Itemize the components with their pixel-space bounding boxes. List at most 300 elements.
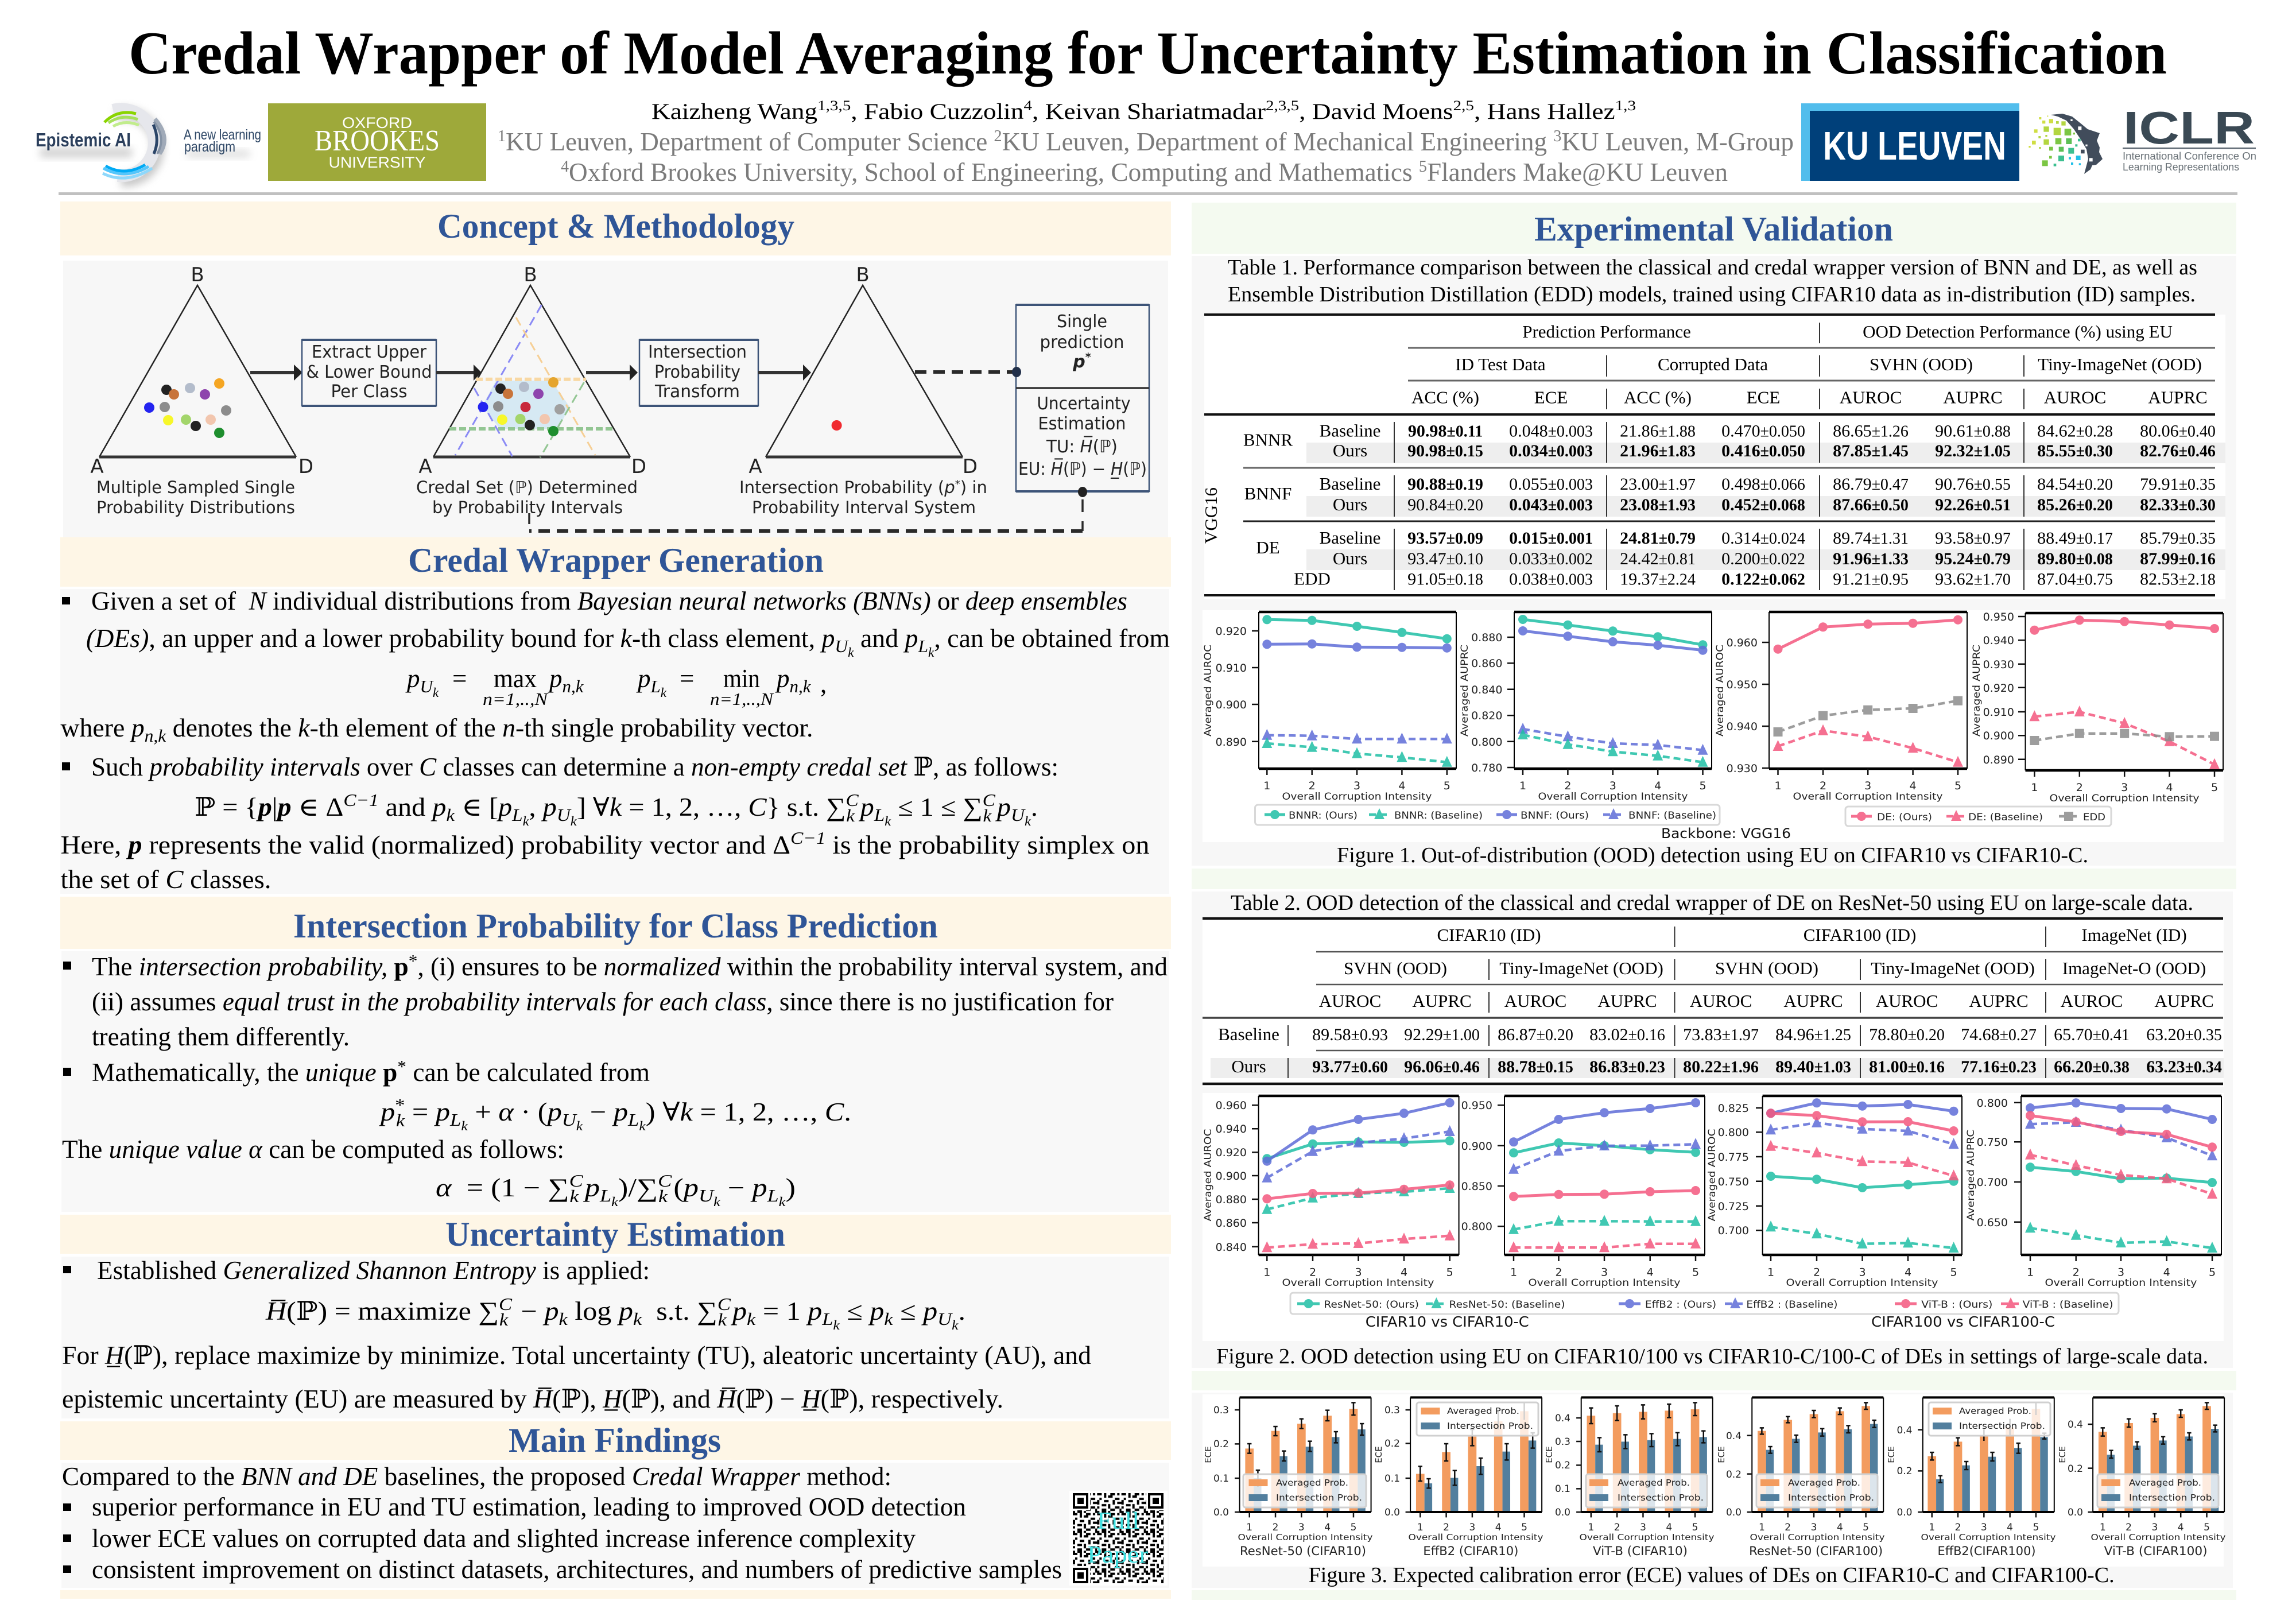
dashed feedback connector bbox=[529, 367, 1087, 531]
table 1 header: Corrupted Data bbox=[1658, 354, 1768, 374]
text: unique value: The unique value α can be computed as follows: bbox=[62, 1135, 564, 1164]
chart: CIFAR10 AUROC: 0.920 bbox=[1216, 1146, 1247, 1159]
logo: ICLR: International Conference On bbox=[2123, 150, 2256, 162]
table 1 data: 93.58±0.97 bbox=[1935, 529, 2011, 548]
logo: Oxford Brookes University: UNIVERSITY bbox=[328, 154, 426, 171]
axis labels: chart 3 ViT-B CIFAR10: ViT-B (CIFAR10) bbox=[1593, 1544, 1688, 1558]
box: extract bounds bbox=[302, 340, 436, 406]
axis labels: chart 1 ResNet-50 CIFAR10: ResNet-50 (CIFAR10) bbox=[1240, 1544, 1366, 1558]
table 1 data: 0.314±0.024 bbox=[1721, 529, 1805, 548]
arrow head bbox=[474, 365, 482, 381]
table 1 row labels bbox=[1201, 420, 1380, 589]
axis labels: chart 2 EffB2 CIFAR10 bbox=[1374, 1405, 1543, 1558]
table 1 data: 93.57±0.09 bbox=[1407, 529, 1483, 548]
label: backbone: Backbone: VGG16 bbox=[1661, 825, 1791, 842]
axis labels: chart 5 EffB2 CIFAR100: 0.2 bbox=[1896, 1466, 1913, 1477]
legend: DE series: EDD bbox=[2083, 812, 2105, 823]
text: probability intervals: Such probability intervals over C classes can determine a non-empty credal set ℙ, as follows: bbox=[91, 753, 1058, 781]
chart: BNN AUPRC: 0.860 bbox=[1471, 657, 1503, 670]
equation: maximize entropy: p bbox=[868, 1297, 884, 1325]
text: uncertainty definitions: epistemic uncertainty (EU) are measured by H̅(ℙ), H̲(ℙ), and H̅(ℙ) − H̲(ℙ), respectively. bbox=[62, 1385, 1003, 1413]
equation: probability bounds: p bbox=[638, 664, 651, 693]
chart: DE AUPRC: Averaged AUPRC bbox=[1971, 645, 1983, 737]
table 1 header bbox=[1411, 321, 2208, 408]
equation: intersection probability: k bbox=[576, 1119, 583, 1133]
authors: 1,3,5 bbox=[817, 98, 851, 114]
arrow head bbox=[294, 365, 302, 381]
logo: Epistemic AI bbox=[36, 109, 261, 180]
axis labels: chart 2 EffB2 CIFAR10: Overall Corruption Intensity bbox=[1409, 1532, 1543, 1542]
caption: figure 1: Figure 1. Out-of-distribution (OOD) detection using EU on CIFAR10 vs CIFAR10-C. bbox=[1337, 843, 2088, 867]
equation: alpha: L bbox=[599, 1185, 611, 1206]
legend: chart 3: Intersection Prob. bbox=[1618, 1493, 1704, 1503]
logo: KU Leuven: KU LEUVEN bbox=[1823, 123, 2006, 168]
table 1 header: SVHN (OOD) bbox=[1870, 354, 1973, 374]
legend: large-scale series: ResNet-50: (Baseline) bbox=[1449, 1299, 1565, 1311]
table 1 data: 23.00±1.97 bbox=[1620, 475, 1696, 494]
equation: maximize entropy: ≤ bbox=[893, 1297, 923, 1325]
axis labels: chart 4 ResNet-50 CIFAR100: 0.0 bbox=[1726, 1507, 1742, 1518]
table 1 data: 23.08±1.93 bbox=[1620, 495, 1696, 514]
chart: CIFAR100 AUROC: 0.775 bbox=[1718, 1151, 1749, 1164]
diagram: intersection probability triangle: Intersection Probability (p bbox=[739, 478, 955, 497]
arrow bbox=[758, 371, 805, 374]
table 1 row labels: Ours bbox=[1333, 494, 1367, 514]
equation: maximize entropy: H̅(ℙ) = maximize ∑ bbox=[266, 1297, 478, 1325]
equation: credal set: k bbox=[446, 805, 455, 825]
equation: maximize entropy: k bbox=[884, 1309, 894, 1329]
chart: CIFAR100 AUROC: 0.825 bbox=[1718, 1102, 1749, 1115]
equation: intersection probability: = bbox=[405, 1098, 436, 1126]
diagram: intersection probability triangle: A bbox=[748, 455, 762, 478]
text: findings list: lower ECE values on corrupted data and slighted increase inference complexity bbox=[92, 1524, 916, 1553]
legend: chart 4 bbox=[1756, 1474, 1878, 1507]
table 1 data: 0.055±0.003 bbox=[1509, 475, 1593, 494]
equation: intersection probability: p bbox=[379, 1098, 395, 1126]
equation: alpha: p bbox=[583, 1173, 600, 1202]
table 1 data: 85.79±0.35 bbox=[2140, 529, 2216, 548]
affiliations bbox=[498, 127, 1794, 187]
dashed connector to output box bbox=[915, 370, 1016, 374]
table 1 data: 0.048±0.003 bbox=[1509, 421, 1593, 441]
equation: alpha: ( bbox=[673, 1173, 684, 1202]
equation: alpha: k bbox=[779, 1195, 786, 1209]
equation: intersection probability: p bbox=[612, 1098, 628, 1126]
text: here p represents: the set of C classes. bbox=[61, 865, 271, 894]
table 1 data: 86.65±1.26 bbox=[1833, 421, 1909, 441]
chart: BNN AUROC: 12345 bbox=[1263, 780, 1450, 792]
table 1 data: 0.452±0.068 bbox=[1721, 495, 1805, 514]
chart: CIFAR10 AUROC bbox=[1203, 1096, 1459, 1289]
legend: chart 6: Averaged Prob. bbox=[2129, 1478, 2201, 1488]
equation: credal set: k = 1, 2, …, C} s.t. ∑ bbox=[610, 793, 840, 821]
chart: CIFAR10 AUPRC: 0.800 bbox=[1461, 1220, 1492, 1233]
axis labels: chart 3 ViT-B CIFAR10: 0.2 bbox=[1555, 1460, 1570, 1471]
table 1 data: 0.470±0.050 bbox=[1721, 421, 1805, 441]
heading: main findings: Main Findings bbox=[509, 1421, 721, 1459]
caption: table 1: Ensemble Distribution Distillation (EDD) models, trained using CIFAR10 data as in-distribution (ID) samples. bbox=[1228, 282, 2196, 307]
equation: intersection probability: U bbox=[562, 1110, 578, 1130]
diagram: intersection probability triangle: Probability Interval System bbox=[752, 498, 976, 517]
table 1 row labels: Baseline bbox=[1320, 528, 1380, 548]
diagram: credal set triangle: A bbox=[418, 455, 432, 478]
table 1 row labels: Ours bbox=[1333, 548, 1367, 568]
logo: ICLR bbox=[2029, 102, 2256, 174]
chart: DE AUROC bbox=[1715, 612, 1967, 803]
equation: probability bounds: U bbox=[420, 676, 434, 696]
equation: probability bounds: = bbox=[680, 664, 694, 693]
table 2 data: 81.00±0.16 bbox=[1869, 1057, 1945, 1076]
table 2 header: AUROC bbox=[1319, 991, 1381, 1011]
axis labels: chart 2 EffB2 CIFAR10: 0.1 bbox=[1384, 1473, 1400, 1485]
table 1 data: 0.034±0.003 bbox=[1509, 441, 1593, 460]
text: given distributions: k bbox=[848, 645, 854, 660]
axis labels: chart 4 ResNet-50 CIFAR100: 0.4 bbox=[1726, 1431, 1742, 1442]
equation: credal set: k bbox=[846, 805, 855, 825]
table 2 data: 83.02±0.16 bbox=[1589, 1025, 1665, 1044]
table 1 data: 21.86±1.88 bbox=[1620, 421, 1696, 441]
legend: chart 2 bbox=[1417, 1402, 1538, 1436]
logo: ICLR: Learning Representations bbox=[2123, 161, 2239, 173]
authors: 2,3,5 bbox=[1266, 98, 1299, 114]
legend: large-scale series: EffB2 : (Ours) bbox=[1645, 1299, 1716, 1311]
table 1 data: 90.88±0.19 bbox=[1407, 475, 1483, 494]
axis labels: chart 6 ViT-B CIFAR100: ECE bbox=[2057, 1446, 2068, 1463]
affiliations: Flanders Make@KU Leuven bbox=[1427, 158, 1728, 187]
axis labels: chart 6 ViT-B CIFAR100: 12345 bbox=[2100, 1522, 2210, 1533]
table 2 header: CIFAR10 (ID) bbox=[1437, 925, 1541, 945]
logo: Oxford Brookes University: OXFORD bbox=[342, 114, 412, 131]
axis labels: chart 3 ViT-B CIFAR10 bbox=[1544, 1413, 1715, 1558]
table 2 data: 80.22±1.96 bbox=[1683, 1057, 1759, 1076]
text: mathematically: Mathematically, the unique p bbox=[92, 1058, 397, 1087]
legend: DE series bbox=[1845, 807, 2111, 826]
text: intersection probability description: * bbox=[409, 951, 417, 971]
table 1 data: 0.416±0.050 bbox=[1721, 441, 1805, 460]
table 2 bbox=[1203, 918, 2224, 1087]
text: intersection probability description: , (i) ensures to be bbox=[417, 952, 604, 981]
table 1 data: 90.98±0.11 bbox=[1408, 421, 1483, 441]
affiliations: 2 bbox=[994, 127, 1002, 145]
chart: CIFAR10 AUPRC: 12345 bbox=[1510, 1266, 1699, 1279]
legend: chart 1 bbox=[1243, 1474, 1366, 1507]
box: outputs: EU: H̅(ℙ) − H̲(ℙ) bbox=[1018, 458, 1147, 479]
logo: ICLR: ICLR bbox=[2123, 102, 2255, 153]
logo: Oxford Brookes University bbox=[268, 103, 486, 181]
authors: , Hans Hallez bbox=[1474, 99, 1615, 124]
equation: credal set: C−1 bbox=[343, 790, 379, 810]
equation: alpha: k bbox=[569, 1186, 580, 1206]
equation: intersection probability: * bbox=[395, 1095, 405, 1115]
decorative band bbox=[1192, 1371, 2236, 1390]
equation: intersection probability: k bbox=[639, 1119, 646, 1133]
diagram: triangle with sampled distributions: D bbox=[298, 455, 313, 478]
legend: chart 5 bbox=[1929, 1402, 2050, 1436]
logo: KU Leuven bbox=[1801, 103, 2019, 181]
diagram: credal set triangle: D bbox=[631, 455, 646, 478]
chart: CIFAR10 AUROC: Overall Corruption Intensity bbox=[1282, 1277, 1434, 1289]
box: outputs: Estimation bbox=[1038, 414, 1126, 434]
table 1 data: 90.61±0.88 bbox=[1935, 421, 2011, 441]
box: outputs: prediction bbox=[1040, 332, 1124, 352]
figure 2 charts bbox=[1203, 1093, 2224, 1341]
table 1 data: 89.80±0.08 bbox=[2037, 549, 2113, 568]
chart: DE AUROC: 0.950 bbox=[1727, 679, 1758, 691]
diagram: triangle with sampled distributions: B bbox=[191, 263, 204, 286]
chart: DE AUPRC: 0.930 bbox=[1983, 658, 2014, 671]
axis labels: chart 2 EffB2 CIFAR10: ECE bbox=[1374, 1446, 1384, 1463]
equation: credal set: p bbox=[995, 793, 1011, 821]
table 2 header: Tiny-ImageNet (OOD) bbox=[1871, 958, 2035, 978]
caption: table 1 bbox=[1228, 255, 2197, 307]
box: extract bounds: Per Class bbox=[331, 382, 408, 402]
equation: intersection probability: p bbox=[434, 1098, 450, 1126]
equation: alpha: ) bbox=[786, 1173, 796, 1202]
chart: BNN AUPRC: Averaged AUPRC bbox=[1459, 645, 1471, 737]
affiliations: KU Leuven, M-Group bbox=[1561, 127, 1794, 156]
table 1 data: 0.122±0.062 bbox=[1721, 570, 1805, 589]
equation: maximize entropy: p bbox=[731, 1297, 747, 1325]
arrow head bbox=[630, 365, 638, 381]
chart: DE AUROC: 12345 bbox=[1774, 780, 1961, 792]
panel: experimental validation header bbox=[1192, 203, 2236, 254]
text: given distributions bbox=[62, 587, 1170, 660]
equation: probability bounds: max bbox=[494, 664, 537, 693]
axis labels: chart 5 EffB2 CIFAR100: ECE bbox=[1886, 1446, 1896, 1463]
legend: BNN series: BNNR: (Ours) bbox=[1289, 810, 1358, 821]
text: here p represents: Here, p represents the valid (normalized) probability vector and Δ bbox=[61, 831, 747, 859]
text: given distributions: (DEs), an upper and a lower probability bound for k-th class element, p bbox=[86, 624, 835, 653]
equation: credal set: L bbox=[511, 805, 523, 825]
equation: alpha: k bbox=[713, 1195, 721, 1209]
equation: probability bounds: = bbox=[452, 664, 467, 693]
table 1 data: 93.47±0.10 bbox=[1407, 549, 1483, 568]
diagram: intersection probability triangle: ) in bbox=[960, 478, 987, 497]
affiliations: KU Leuven, Department of Mechanical Engineering bbox=[1002, 127, 1553, 156]
legend: chart 5: Averaged Prob. bbox=[1959, 1406, 2031, 1416]
chart: CIFAR10 AUROC: 12345 bbox=[1263, 1266, 1453, 1279]
legend: chart 5: Intersection Prob. bbox=[1959, 1421, 2045, 1431]
table 1 data: 0.033±0.002 bbox=[1509, 549, 1593, 568]
table 1 data: 0.200±0.022 bbox=[1721, 549, 1805, 568]
table 1 data: 0.038±0.003 bbox=[1509, 570, 1593, 589]
legend: chart 3: Averaged Prob. bbox=[1618, 1478, 1690, 1488]
panel: intersection probability bbox=[60, 897, 1171, 1212]
chart: BNN AUPRC: 0.820 bbox=[1471, 710, 1503, 722]
table 1 data: 95.24±0.79 bbox=[1935, 549, 2011, 568]
diagram: triangle with sampled distributions: Probability Distributions bbox=[96, 498, 295, 517]
table 2 data: 66.20±0.38 bbox=[2054, 1057, 2130, 1076]
chart: BNN AUROC bbox=[1203, 612, 1456, 803]
panel: credal wrapper generation bbox=[60, 537, 1171, 894]
axis labels: chart 5 EffB2 CIFAR100: 0.4 bbox=[1896, 1425, 1913, 1436]
chart: CIFAR100 AUROC bbox=[1707, 1096, 1962, 1289]
equation: maximize entropy: k bbox=[952, 1318, 959, 1332]
chart: CIFAR10 AUROC: 0.900 bbox=[1216, 1170, 1247, 1183]
axis labels: chart 4 ResNet-50 CIFAR100: ResNet-50 (CIFAR100) bbox=[1749, 1544, 1883, 1558]
legend: DE series: DE: (Ours) bbox=[1877, 812, 1932, 823]
arrow bbox=[250, 371, 296, 374]
chart: CIFAR100 AUPRC: 0.800 bbox=[1977, 1097, 2008, 1110]
text: intersection probability description: (ii) assumes equal trust in the probability intervals for each class, since there is no justification for bbox=[92, 987, 1114, 1016]
panel: table 1 and figure 1 bbox=[1192, 255, 2236, 867]
chart: BNN AUPRC: 0.840 bbox=[1471, 684, 1503, 696]
equation: probability bounds: p bbox=[549, 664, 563, 693]
chart: CIFAR100 AUROC: 0.750 bbox=[1718, 1176, 1749, 1188]
legend: chart 1: Averaged Prob. bbox=[1276, 1478, 1348, 1488]
axis labels: chart 6 ViT-B CIFAR100: Overall Corruption Intensity bbox=[2091, 1532, 2226, 1542]
table 2 data: 96.06±0.46 bbox=[1404, 1057, 1480, 1076]
table 1 data: 89.74±1.31 bbox=[1833, 529, 1909, 548]
legend: large-scale series: ViT-B : (Baseline) bbox=[2023, 1299, 2113, 1311]
equation: maximize entropy: k bbox=[633, 1309, 643, 1329]
box: outputs: Uncertainty bbox=[1037, 394, 1131, 414]
heading: experimental validation: Experimental Validation bbox=[1534, 210, 1893, 248]
table 1 header: ID Test Data bbox=[1455, 354, 1546, 374]
text: intersection probability description: The intersection probability, p bbox=[92, 952, 409, 981]
axis labels: chart 4 ResNet-50 CIFAR100: ECE bbox=[1716, 1446, 1727, 1463]
axis labels: chart 6 ViT-B CIFAR100: 0.2 bbox=[2068, 1463, 2083, 1475]
diagram: intersection probability triangle: D bbox=[963, 455, 978, 478]
table 1 row labels: Ours bbox=[1333, 440, 1367, 460]
table 2 data: 77.16±0.23 bbox=[1961, 1057, 2037, 1076]
equation: intersection probability: ) ∀ bbox=[646, 1098, 680, 1126]
table 1 data: 85.26±0.20 bbox=[2037, 495, 2113, 514]
table 1 row labels: BNNR bbox=[1243, 430, 1293, 450]
text: mathematically: can be calculated from bbox=[406, 1058, 650, 1087]
axis labels: chart 4 ResNet-50 CIFAR100: 12345 bbox=[1759, 1522, 1869, 1533]
table 2 data: 74.68±0.27 bbox=[1961, 1025, 2037, 1044]
decorative band bbox=[1192, 869, 2236, 889]
chart: BNN AUPRC bbox=[1459, 612, 1712, 803]
table 1 data: 87.04±0.75 bbox=[2037, 570, 2113, 589]
authors: , David Moens bbox=[1299, 99, 1453, 124]
axis labels: chart 2 EffB2 CIFAR10: EffB2 (CIFAR10) bbox=[1423, 1544, 1518, 1558]
table 1 header: ECE bbox=[1534, 387, 1568, 408]
equation: intersection probability: L bbox=[627, 1110, 639, 1130]
equation: probability bounds: L bbox=[650, 676, 661, 696]
table 1 row labels: Baseline bbox=[1320, 474, 1380, 494]
table 2 header: AUROC bbox=[1690, 991, 1752, 1011]
table 1 header: Prediction Performance bbox=[1522, 321, 1691, 342]
heading: uncertainty estimation: Uncertainty Estimation bbox=[445, 1215, 785, 1253]
diagram: intersection probability triangle: * bbox=[955, 478, 960, 490]
legend: BNN series: BNNR: (Baseline) bbox=[1394, 810, 1483, 821]
table 2 header: AUPRC bbox=[1597, 991, 1657, 1011]
chart: DE AUROC: 0.930 bbox=[1727, 762, 1758, 775]
QR code: full paper bbox=[1069, 1491, 1168, 1586]
arrow bbox=[436, 371, 475, 374]
equation: maximize entropy: k bbox=[833, 1318, 840, 1332]
table 2 data: 78.80±0.20 bbox=[1869, 1025, 1945, 1044]
logo: Epistemic AI: paradigm bbox=[184, 139, 235, 155]
axis labels: chart 2 EffB2 CIFAR10: 12345 bbox=[1417, 1522, 1527, 1533]
axis labels: chart 5 EffB2 CIFAR100 bbox=[1886, 1425, 2056, 1558]
chart: CIFAR100 AUPRC: 0.700 bbox=[1977, 1176, 2008, 1189]
equation: maximize entropy: U bbox=[937, 1309, 953, 1329]
table 1 data: 88.49±0.17 bbox=[2037, 529, 2113, 548]
axis labels: chart 1 ResNet-50 CIFAR10: 0.0 bbox=[1213, 1507, 1229, 1518]
table 2 data: 89.40±1.03 bbox=[1775, 1057, 1851, 1076]
box: outputs: TU: H̅(ℙ) bbox=[1046, 436, 1118, 457]
equation: credal set: ≤ 1 ≤ ∑ bbox=[891, 793, 983, 821]
authors: 1,3 bbox=[1615, 98, 1636, 114]
chart: CIFAR10 AUPRC: 0.850 bbox=[1461, 1180, 1492, 1193]
table 1 header: ACC (%) bbox=[1411, 387, 1479, 408]
text: findings intro: Compared to the BNN and DE baselines, the proposed Credal Wrapper method: bbox=[62, 1462, 891, 1491]
equation: credal set: p bbox=[497, 793, 512, 821]
table 1 row labels: VGG16 bbox=[1201, 487, 1221, 544]
table 2 header: AUPRC bbox=[1412, 991, 1472, 1011]
chart: CIFAR100 AUPRC: Averaged AUPRC bbox=[1965, 1130, 1977, 1220]
equation: probability bounds: n=1,..,N bbox=[483, 689, 549, 709]
equation: credal set: k bbox=[885, 814, 891, 828]
caption: figure 2: Figure 2. OOD detection using EU on CIFAR10/100 vs CIFAR10-C/100-C of DEs in settings of large-scale data. bbox=[1216, 1344, 2208, 1369]
chart: CIFAR10 AUPRC: Overall Corruption Intensity bbox=[1528, 1277, 1681, 1289]
chart: BNN AUROC: Overall Corruption Intensity bbox=[1282, 791, 1432, 803]
axis labels: chart 2 EffB2 CIFAR10: 0.3 bbox=[1384, 1405, 1400, 1416]
heading: credal wrapper generation: Credal Wrapper Generation bbox=[408, 541, 824, 579]
legend: chart 2: Intersection Prob. bbox=[1447, 1421, 1533, 1431]
equation: maximize entropy: k bbox=[718, 1309, 727, 1330]
affiliations: 5 bbox=[1419, 158, 1427, 176]
chart: BNN AUPRC: Overall Corruption Intensity bbox=[1538, 791, 1688, 803]
caption: figure 3: Figure 3. Expected calibration error (ECE) values of DEs on CIFAR10-C and CIFAR100-C. bbox=[1309, 1563, 2115, 1587]
table 2 header: CIFAR100 (ID) bbox=[1804, 925, 1916, 945]
chart: BNN AUPRC: 0.880 bbox=[1471, 631, 1503, 644]
equation: maximize entropy: k bbox=[499, 1309, 509, 1330]
logo: Oxford Brookes University: BROOKES bbox=[315, 125, 440, 157]
text: given distributions: L bbox=[917, 636, 928, 656]
equation: alpha: )/∑ bbox=[618, 1173, 658, 1202]
table 1 data: 24.42±0.81 bbox=[1620, 549, 1696, 568]
equation: intersection probability: L bbox=[449, 1110, 461, 1130]
table 2 header: SVHN (OOD) bbox=[1715, 958, 1818, 978]
equation: credal set: U bbox=[1011, 805, 1026, 825]
equation: credal set: p bbox=[430, 793, 446, 821]
axis labels: chart 3 ViT-B CIFAR10: 0.4 bbox=[1555, 1413, 1570, 1424]
chart: CIFAR10 AUROC: Averaged AUROC bbox=[1203, 1129, 1214, 1222]
table 1 data: 93.62±1.70 bbox=[1935, 570, 2011, 589]
axis labels: chart 4 ResNet-50 CIFAR100: 0.2 bbox=[1726, 1469, 1742, 1480]
equation: maximize entropy: p bbox=[542, 1297, 559, 1325]
chart: CIFAR10 AUROC: 0.860 bbox=[1216, 1217, 1247, 1230]
table 1 data: 90.98±0.15 bbox=[1407, 441, 1483, 460]
chart: CIFAR100 AUROC: 0.725 bbox=[1718, 1200, 1749, 1213]
table 1 row labels: DE bbox=[1256, 537, 1280, 557]
table 1 data: 85.55±0.30 bbox=[2037, 441, 2113, 460]
diagram: triangle with sampled distributions: A bbox=[90, 455, 104, 478]
axis labels: chart 1 ResNet-50 CIFAR10: ECE bbox=[1203, 1446, 1213, 1463]
axis labels: chart 1 ResNet-50 CIFAR10: 0.1 bbox=[1213, 1473, 1229, 1485]
table 2 header: AUPRC bbox=[2154, 991, 2214, 1011]
table 1 header: AUROC bbox=[2044, 387, 2106, 408]
table 2 header: Ours bbox=[1231, 1056, 1266, 1076]
equation: probability bounds: k bbox=[433, 685, 439, 700]
box: outputs: p bbox=[1073, 352, 1085, 372]
table 1 data: 92.32±1.05 bbox=[1935, 441, 2011, 460]
arrow head bbox=[803, 365, 811, 381]
equation: credal set: U bbox=[557, 805, 572, 825]
legend: chart 3 bbox=[1586, 1474, 1707, 1507]
equation: maximize entropy: k bbox=[559, 1309, 568, 1329]
axis labels: chart 5 EffB2 CIFAR100: Overall Corruption Intensity bbox=[1921, 1532, 2056, 1542]
table 1 data: 90.84±0.20 bbox=[1407, 495, 1483, 514]
legend: large-scale series: ViT-B : (Ours) bbox=[1921, 1299, 1992, 1311]
equation: maximize entropy: k bbox=[747, 1309, 757, 1329]
chart: DE AUROC: Overall Corruption Intensity bbox=[1793, 791, 1942, 803]
chart: DE AUROC: 0.960 bbox=[1727, 637, 1758, 649]
